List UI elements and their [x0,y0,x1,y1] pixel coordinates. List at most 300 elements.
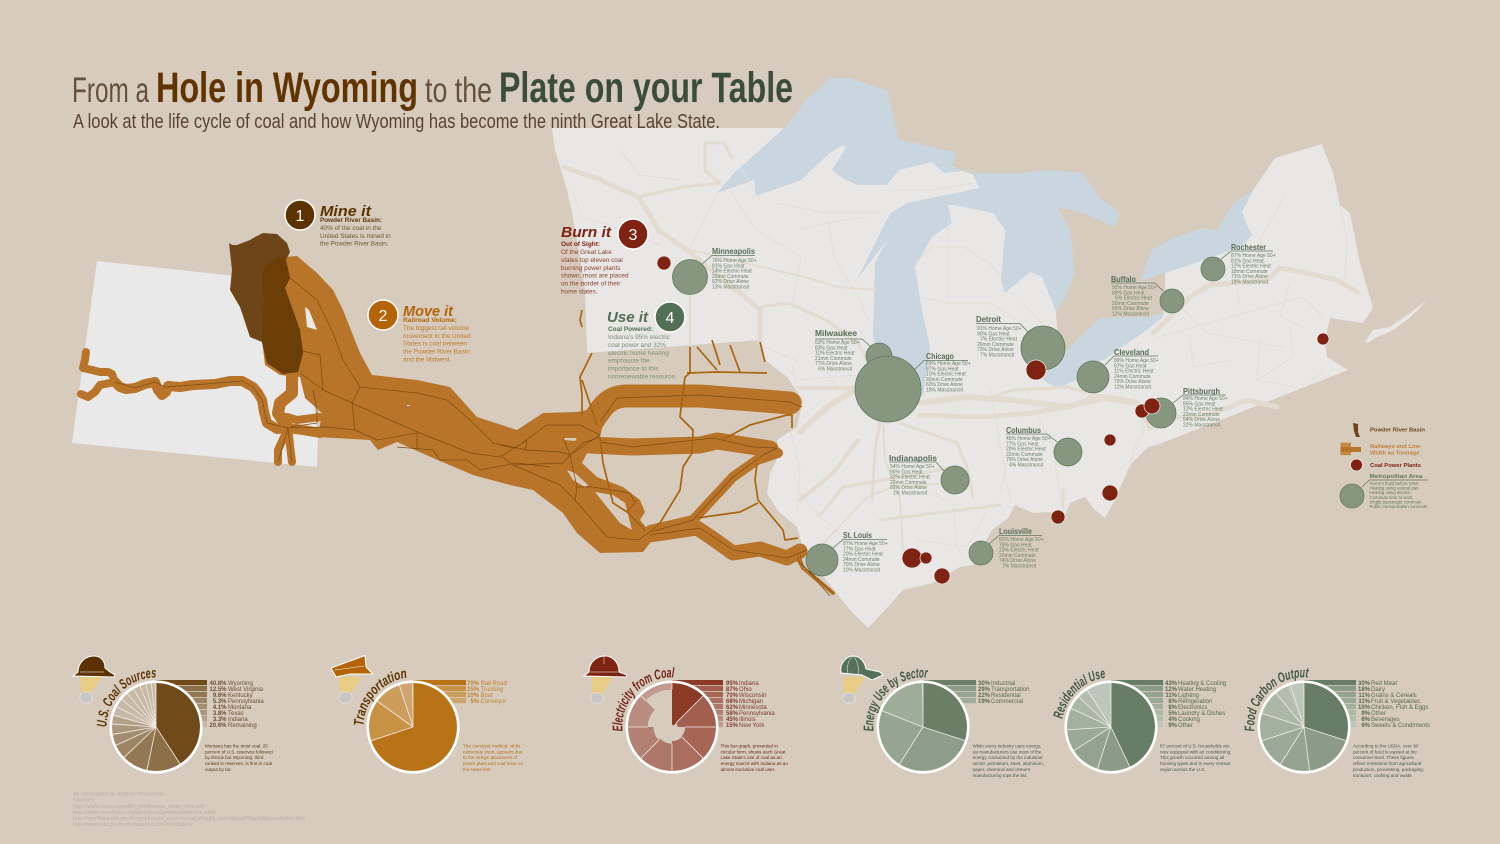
list: residential percentages: 9% [1168,723,1178,729]
pie chart: energy by sector [878,682,968,772]
city label: Cleveland: 70% Drive Alone [1114,379,1151,385]
title: to the [425,71,492,110]
city label: Louisville: 74% Drive Alone [999,558,1036,564]
list: coal source percentages: 3.8% [213,711,227,717]
city label: Rochester: 71% Drive Alone [1231,274,1268,280]
subtitle: A look at the life cycle of coal and how Wyoming has become the ninth Great Lake State. [73,111,720,133]
radial bar chart: electricity from coal [626,681,718,773]
list: food percentages: 6% [1361,723,1371,729]
bars: electricity from coal [672,680,723,727]
list: coal source percentages: Kentucky [228,693,253,699]
city label: Detroit: 91% Home Age 50+ [977,326,1022,332]
city label: Milwaukee: 21min Commute [815,356,852,362]
city label: Louisville: 78% Gas Heat [999,542,1032,548]
text: energy description: six manufacturers use most of the [972,749,1042,754]
legend: metropolitan area [1340,474,1428,509]
list: energy percentages: 29% [978,687,991,693]
text: food description: consumer level. These figures [1353,755,1415,760]
text: food description: transport, cooking and waste. [1353,773,1413,778]
legend: railways: Railways and Line [1370,444,1421,450]
text: electricity description: energy source with Indiana as an [720,761,788,766]
text: electricity description: This bar graph, presented in [720,744,778,748]
list: energy percentages: 22% [978,693,991,699]
list: coal source percentages: 3.3% [213,717,227,723]
city label: Louisville: 82% Home Age 50+ [999,537,1044,543]
callout 3: Burn it: home states. [561,288,598,296]
pie chart: food carbon output [1259,682,1349,772]
city label: Cleveland: 11% Electric Heat [1114,369,1154,375]
list: transportation percentages: Rail Road [480,681,507,687]
city label: Pittsburgh: 22min Commute [1183,412,1220,418]
city label: Detroit [976,315,1028,358]
heading: Food Carbon Output: Food Carbon Output [1244,668,1309,731]
city label: Minneapolis: 76% Home Age 50+ [712,258,757,264]
credits and sources: http://www.nma.org/pdf/c_production_state_rank.pdf [73,804,204,810]
list: food percentages: 11% [1358,699,1371,705]
text: transportation description: power plant and coal mine on [463,761,523,766]
list: coal electricity percentages: Illinois [739,717,756,723]
city label: Chicago: 32min Commute [926,377,963,383]
bars: energy by sector [923,680,976,703]
city label: Milwaukee: 83% Gas Heat [815,345,848,351]
list: residential percentages: 8% [1168,705,1178,711]
city label: Indianapolis: 32% Electric Heat [890,475,930,481]
credits and sources [73,792,305,828]
callout 2: Move it: movement in the United [403,333,471,340]
callout 3: Burn it: on the border of their [561,280,621,288]
list: energy percentages: Industrial [991,681,1015,687]
city label: Milwaukee: 77% Drive Alone [815,361,852,367]
text: energy description: paper, chemical and cement [972,767,1031,772]
city label: Indianapolis: 54% Home Age 50+ [890,464,935,470]
credits and sources: Sources: [73,798,96,804]
list: residential percentages: 43% [1165,681,1178,687]
list: transportation percentages: Trucking [480,687,503,693]
callout 3: Burn it: Of the Great Lake [561,249,612,256]
text: residential description: 87 percent of U.S. households are [1160,744,1230,748]
city label: Chicago: 18% Masstransit [926,388,964,394]
list: coal electricity percentages: Michigan [739,699,763,705]
city label: Chicago: Chicago [926,352,954,361]
list: coal source percentages [209,681,264,729]
city label: Columbus: Columbus [1006,426,1041,435]
city label: Rochester: 18min Commute [1231,269,1268,275]
city label: St. Louis: 10% Masstransit [843,568,881,574]
city label: Pittsburgh: 85% Gas Heat [1183,401,1216,407]
panel: Food Carbon Output [1244,668,1430,778]
callout 2: Move it: 2 [379,308,388,325]
bars: coal sources [156,680,207,727]
city label: Indianapolis: 22min Commute [890,480,927,486]
callout 4: Use it: emphasize the [608,358,650,364]
panel: U.S. Coal Sources [72,656,273,774]
city label: Columbus: 22min Commute [1006,452,1043,458]
city label: St. Louis [833,531,888,574]
list: coal source percentages: Montana [228,705,252,711]
text: transportation description: the same site. [463,767,492,772]
title [72,64,793,112]
heading: U.S. Coal Sources: U.S. Coal Sources [96,670,156,726]
text: energy description: While every industry uses energy, [972,744,1041,748]
callout 3: Burn it: shown, most are placed [561,272,629,280]
text: food description: percent of food is wasted at the [1353,749,1417,754]
city label: Detroit: Detroit [976,315,1001,324]
pie chart: transportation [368,682,458,772]
text: transportation description: to the stregic placement of [463,755,518,760]
heading: Energy Use by Sector: Energy Use by Sector [864,668,928,731]
callout 4: Use it: 4 [666,310,675,327]
callout 1: Mine it: 40% of the coal in the [320,225,382,232]
callout 2: Move it: The biggest rail volume [403,325,470,332]
city label: Rochester: Rochester [1231,243,1266,252]
city label: Pittsburgh [1173,387,1228,428]
callout 3: Burn it [561,219,648,296]
bars: transportation [413,680,466,703]
heading: Residential Use: Residential Use [1053,670,1105,719]
text: energy description: manufacturing tops the list. [972,773,1027,778]
icon: baseball cap light bulb [841,656,883,703]
list: coal source percentages: 40.8% [209,681,227,687]
list: residential percentages: Other [1178,723,1193,729]
list: food percentages [1358,681,1430,729]
city label: Rochester: 81% Gas Heat [1231,258,1264,264]
city label: Cleveland [1105,348,1159,390]
city label: Detroit: 90% Gas Heat [977,331,1010,337]
list: coal source percentages: 12.5% [209,687,227,693]
text: transportation description: extremely short, appears due [463,749,523,754]
city label: Louisville: 20% Electric Heat [999,548,1039,554]
city label: Indianapolis [889,454,944,496]
city label: Buffalo: 89% Gas Heat [1112,290,1145,296]
legend: railways [1340,443,1421,456]
list: transportation percentages: 70% [467,681,480,687]
text: electricity description: circular form, shows each Great [720,749,786,754]
list: coal electricity percentages: 87% [726,687,739,693]
list: energy percentages: 30% [978,681,991,687]
title: From a [72,71,149,110]
text: residential description: This growth occurred among all [1160,755,1224,760]
list: coal electricity percentages: 70% [726,693,739,699]
icon: conductor cap light bulb [331,656,373,703]
city label: St. Louis: St. Louis [843,531,872,540]
list: coal electricity percentages: 68% [726,699,739,705]
list: coal electricity percentages: 62% [726,705,739,711]
callout 4: Use it: Use it [607,309,649,326]
city label: Pittsburgh: 22% Masstransit [1183,422,1221,428]
bars: residential use [1111,680,1163,727]
list: transportation percentages: 15% [467,687,480,693]
city label: Minneapolis: 22min Commute [712,274,749,280]
map: Great Lakes [717,78,1253,397]
map: highways and rail network on Great Lakes states [564,143,1357,557]
city label: Pittsburgh: Pittsburgh [1183,387,1220,396]
list: food percentages: 10% [1358,705,1371,711]
city label: Louisville [989,527,1044,570]
list: transportation percentages [467,681,507,705]
city label: St. Louis: 77% Gas Heat [843,546,876,552]
callout 1: Mine it: United States is mined in [320,233,391,240]
list: food percentages: 6% [1361,717,1371,723]
list: food percentages: Other [1371,711,1386,717]
city label: Louisville: Louisville [999,527,1032,536]
city label: Louisville: 7% Masstransit [1002,564,1037,570]
list: food percentages: 11% [1358,693,1371,699]
city label: St. Louis: 87% Home Age 50+ [843,541,888,547]
city label: Rochester: 12% Electric Heat [1231,264,1271,270]
text: coal sources description: ranked in reserves, is first in coal [205,761,272,766]
legend: coal power plants: Coal Power Plants [1370,463,1421,469]
heading: Electricity from Coal: Electricity from Coal [612,667,674,731]
city label: Pittsburgh: 54% Drive Alone [1183,417,1220,423]
city label: Columbus: 79% Drive Alone [1006,457,1043,463]
list: food percentages: Beverages [1371,717,1400,723]
city label: Minneapolis: 81% Gas Heat [712,263,745,269]
legend: metropolitan area: Heating using natural gas [1370,486,1418,491]
city label: Rochester: 87% Home Age 50+ [1231,253,1276,259]
list: residential percentages: 12% [1165,687,1178,693]
city label: Detroit: 26min Commute [977,342,1014,348]
legend: Powder River Basin: Powder River Basin [1370,428,1425,434]
legend: metropolitan area: Commute time to work [1370,495,1413,500]
city label: Chicago: 10% Electric Heat [926,372,966,378]
text: food description: production, processing, packaging, [1353,767,1424,772]
text: coal sources description: output by far. [205,767,232,772]
city label: Cleveland: 87% Gas Heat [1114,363,1147,369]
text: coal sources description: percent of U.S. reserves followed [205,749,273,754]
legend: metropolitan area: Home's build before 1960 [1370,481,1419,486]
list: residential percentages: Water Heating [1178,687,1216,693]
city label: Minneapolis: 62% Drive Alone [712,279,749,285]
text: energy description: sector; petroleum, steel, aluminum, [972,761,1044,766]
city label: Detroit: 7% Electric Heat [980,337,1018,343]
map: Wyoming [72,261,318,467]
text: residential description: housing types and in every census [1160,761,1231,766]
callout 2: Move it: Move it [403,303,454,320]
callout 1: Mine it: 1 [296,208,305,225]
list: transportation percentages: 5% [470,699,480,705]
list: energy percentages: 19% [978,699,991,705]
callout 1: Mine it [285,200,391,248]
city label: Indianapolis: 66% Gas Heat [890,469,923,475]
callout 3: Burn it: 3 [629,227,638,244]
bars: food carbon output [1304,680,1356,727]
list: coal electricity percentages: 15% [726,723,739,729]
legend [1340,423,1428,509]
city label: St. Louis: 24min Commute [843,557,880,563]
callout 3: Burn it: states top eleven coal [561,257,623,264]
list: residential percentages: Heating & Cooling [1178,681,1226,687]
city label: Minneapolis: 13% Masstransit [712,284,750,290]
legend: metropolitan area: Single passenger commute [1370,499,1422,504]
list: residential percentages: 8% [1168,699,1178,705]
city label: Buffalo: Buffalo [1111,275,1136,284]
text: coal sources description: by Illinois but Wyoming, third [205,755,264,760]
panel: Transportation [330,654,523,774]
list: coal electricity percentages: 95% [726,681,739,687]
city label: Louisville: 20min Commute [999,553,1036,559]
list: food percentages: Red Meat [1371,681,1397,687]
credits and sources: http://www.eia.gov/tools/faqs/faq.cfm?id=69&t=2 [73,822,193,828]
pie chart: residential use [1066,682,1156,772]
chart: coal railway flows with line width as tonnage [81,256,833,596]
city label: Indianapolis: Indianapolis [889,454,938,463]
list: food percentages: 18% [1358,687,1371,693]
list: coal electricity percentages: Indiana [739,681,759,687]
list: coal source percentages: Indiana [228,717,248,723]
city label: Milwaukee: 63% Home Age 50+ [815,340,860,346]
list: residential percentages: Electronics [1178,705,1207,711]
text: food description: According to the USDA, over 30 [1353,744,1419,748]
list: residential percentages: Lighting [1178,693,1199,699]
list: energy percentages [978,681,1029,705]
callout 2: Move it: the Powder River Basin [403,348,470,356]
legend: metropolitan area: Public transportation commute [1370,504,1428,509]
list: coal source percentages: West Virginia [228,687,264,693]
title: Hole in Wyoming [156,64,418,112]
credits and sources: http://ops.fhwa.dot.gov/freight/freight_analysis/nat_freight_stats/docs/09factsfigures/index.htm [73,816,305,822]
city label: Minneapolis [702,247,757,290]
list: coal source percentages: 4.1% [213,705,227,711]
list: food percentages: 30% [1358,681,1371,687]
city label: Pittsburgh: 12% Electric Heat [1183,407,1223,413]
callout 4: Use it: electric home heating [608,350,669,357]
list: food percentages: Fruit & Vegetables [1371,699,1420,705]
city label: Cleveland: 89% Home Age 50+ [1114,358,1159,364]
list: food percentages: 9% [1361,711,1371,717]
list: coal source percentages: Pennsylvania [228,699,264,705]
callout 1: Mine it: Powder River Basin: [320,217,382,224]
city label: Chicago: 87% Gas Heat [926,366,959,372]
city label: Cleveland: 12% Masstransit [1114,384,1152,390]
city label: St. Louis: 20% Electric Heat [843,552,883,558]
list: coal source percentages: 20.6% [209,723,227,729]
city label: Columbus [1006,426,1057,468]
list: transportation percentages: Conveyor [480,699,506,705]
city label: Rochester [1220,243,1276,286]
city label: Milwaukee [815,329,870,372]
city label: Columbus: 20% Electric Heat [1006,447,1046,453]
city label: Minneapolis: Minneapolis [712,247,756,256]
title: Plate on your Table [499,64,793,112]
list: coal electricity percentages [726,681,775,729]
credits and sources: An Infographic by Andrew McConville [73,792,164,798]
text: transportation description: The conveyor method, while [463,744,521,748]
callout 2: Move it: States is coal between [403,340,467,348]
callout 4: Use it: coal power and 32% [608,342,666,349]
list: coal source percentages: Remaining [228,723,257,729]
list: coal source percentages: Wyoming [228,681,253,687]
icon: miner helmet light bulb [73,656,115,703]
credits and sources: http://www.teachcoal.org/aboutcoal/articles/states/in.html [73,810,215,816]
list: energy percentages: Commercial [991,699,1023,705]
icon: red hard hat light bulb [584,656,627,703]
callout 3: Burn it: Out of Sight: [561,241,600,248]
city label: Buffalo: 20min Commute [1112,301,1149,307]
panel: Energy Use by Sector [840,656,1044,778]
city label: St. Louis: 70% Drive Alone [843,562,880,568]
list: energy percentages: Residential [991,693,1021,699]
city label: Pittsburgh: 84% Home Age 50+ [1183,396,1228,402]
heading: Transportation: Transportation [354,670,406,725]
callout 4: Use it: nonrenewable resource. [608,374,677,380]
city label: Buffalo [1111,275,1163,318]
city label: Detroit: 7% Masstransit [980,352,1015,358]
callout 3: Burn it: Burn it [561,224,612,241]
city label: Buffalo: 12% Masstransit [1112,312,1150,318]
list: residential percentages: 4% [1168,717,1178,723]
list: residential percentages: Refrigeration [1178,699,1212,705]
callout 4: Use it: Coal Powered: [608,326,653,333]
text: coal sources description: Montana has the most coal, 25 [205,744,268,748]
callout 4: Use it: Indiana's 95% electric [608,334,671,341]
text: residential description: now equipped with air conditioning. [1160,749,1232,754]
city label: Cleveland: 24min Commute [1114,374,1151,380]
list: coal source percentages: 9.6% [213,693,227,699]
legend: metropolitan area: Heating using electric [1370,490,1411,495]
city label: Columbus: 4% Masstransit [1009,462,1044,468]
legend: railways: Width as Tonnage [1370,450,1420,456]
text: energy description: energy consumed by the industrial [972,755,1042,760]
callout 2: Move it: and the Midwest. [403,356,452,364]
map: Great Lakes states land [552,128,1428,628]
list: residential percentages: Cooking [1178,717,1200,723]
callout 2: Move it: Railroad Volume: [403,317,457,324]
city label: Chicago: 69% Home Age 50+ [926,361,971,367]
list: food percentages: Chicken, Fish & Eggs [1371,705,1428,711]
list: coal electricity percentages: Ohio [739,687,752,693]
list: food percentages: Sweets & Condiments [1371,723,1430,729]
city label: Milwaukee: Milwaukee [815,329,858,338]
pie chart: coal sources [111,682,201,772]
callout 3: Burn it: burning power plants [561,265,620,272]
city label: Columbus: 46% Home Age 50+ [1006,436,1051,442]
callout 4: Use it [607,302,685,380]
list: residential percentages: Laundry & Dishes [1178,711,1225,717]
list: food percentages: Grains & Cereals [1371,693,1417,699]
panel: Electricity from Coal [582,656,788,774]
legend: metropolitan area: Metropolitan Area [1370,474,1423,480]
city label: Rochester: 18% Masstransit [1231,280,1269,286]
city label: Detroit: 73% Drive Alone [977,347,1014,353]
city label: Cleveland: Cleveland [1114,348,1149,357]
list: residential percentages: 11% [1165,693,1178,699]
callout 4: Use it: importance to this [608,366,658,372]
callout 1: Mine it: the Powder River Basin. [320,240,389,248]
list: coal electricity percentages: 45% [726,717,739,723]
list: coal electricity percentages: 58% [726,711,739,717]
list: coal source percentages: Texas [228,711,244,717]
city label: Columbus: 77% Gas Heat [1006,441,1039,447]
list: coal electricity percentages: Minnesota [739,705,767,711]
callout 2: Move it [368,300,471,364]
text: residential description: region across the U.S. [1160,767,1205,772]
city label: Chicago: 63% Drive Alone [926,382,963,388]
city label: Indianapolis: 82% Drive Alone [890,485,927,491]
city label: Indianapolis: 2% Masstransit [893,490,928,496]
list: coal source percentages: 5.3% [213,699,227,705]
list: coal electricity percentages: New York [739,723,765,729]
city label: Buffalo: 66% Drive Alone [1112,306,1149,312]
panel: Residential Use [1053,670,1232,774]
map: Powder River Basin [229,233,303,374]
list: coal electricity percentages: Pennsylvania [739,711,775,717]
list: food percentages: Dairy [1371,687,1385,693]
city label: Minneapolis: 14% Electric Heat [712,269,752,275]
text: food description: reflect emissions from agricultural [1353,761,1421,766]
map: metropolitan area circles and power plants [657,256,1329,584]
list: residential percentages: 5% [1168,711,1178,717]
list: transportation percentages: 10% [467,693,480,699]
